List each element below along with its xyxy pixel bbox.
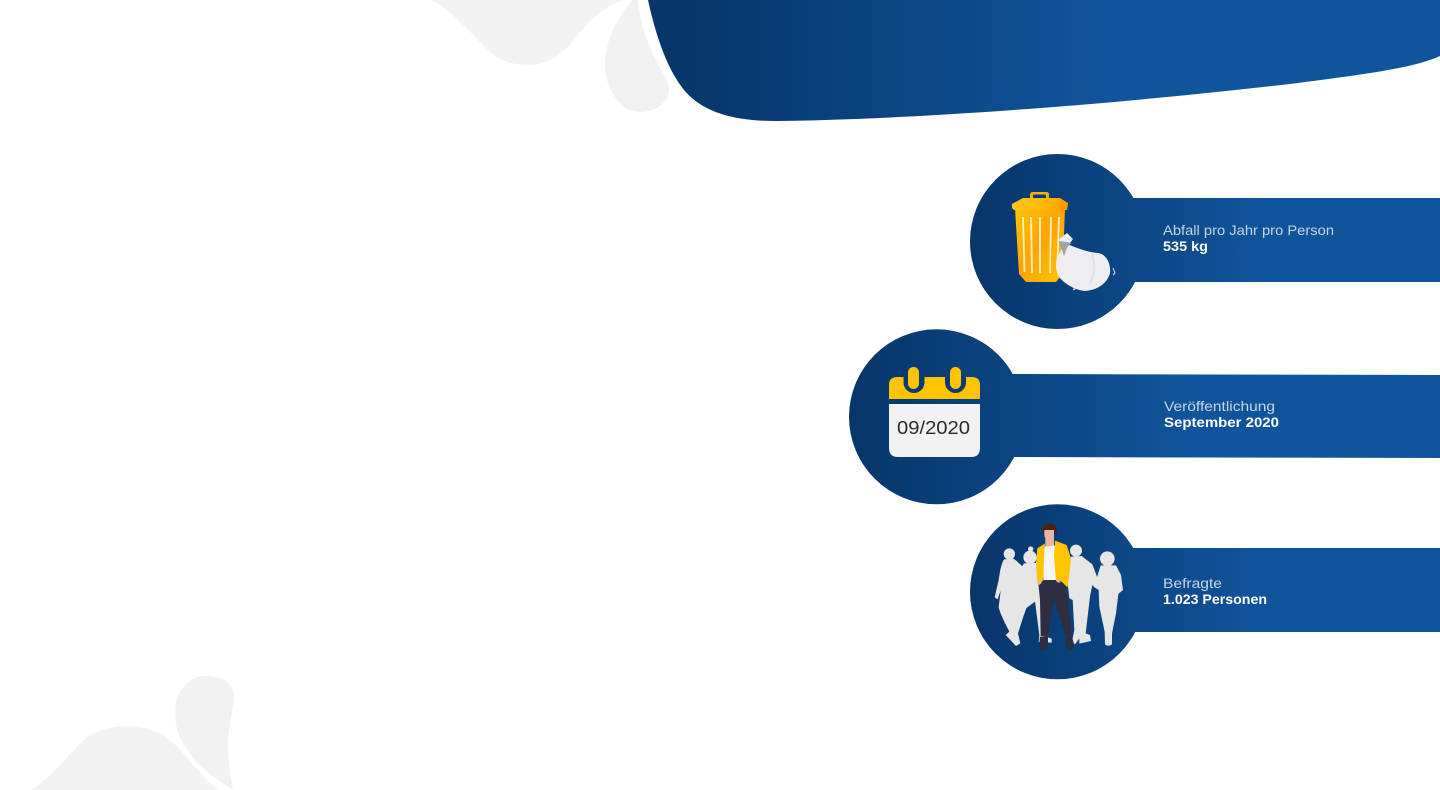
- icon: trash bin with bag: [1012, 192, 1115, 291]
- panel: respondents: [970, 504, 1440, 679]
- icon: calendar: [889, 367, 980, 457]
- decorative shape: bottom grey mound: [32, 726, 218, 790]
- label: waste text: 535 kg: [1163, 238, 1208, 254]
- label: respondents text: 1.023 Personen: [1163, 591, 1267, 607]
- label: publication text: September 2020: [1164, 414, 1279, 430]
- decorative shape: top grey drop: [605, 0, 669, 112]
- label: waste text: Abfall pro Jahr pro Person: [1163, 222, 1334, 238]
- panel: publication date: [849, 329, 1440, 504]
- panel: waste per year: [970, 154, 1440, 329]
- icon: calendar: 09/2020: [897, 417, 970, 438]
- band: publication: [1000, 374, 1440, 458]
- band: respondents: [1120, 548, 1440, 632]
- circle: respondents: [970, 504, 1145, 679]
- label: publication text: Veröffentlichung: [1164, 398, 1275, 414]
- decorative shape: bottom grey drop: [175, 676, 234, 790]
- circle: publication: [849, 329, 1024, 504]
- circle: waste: [970, 154, 1145, 329]
- band: waste: [1120, 198, 1440, 282]
- label: respondents text: [1163, 575, 1267, 607]
- decorative shape: top grey mound: [430, 0, 623, 65]
- label: waste text: [1163, 222, 1334, 254]
- top blue banner: [648, 0, 1440, 121]
- label: respondents text: Befragte: [1163, 575, 1222, 591]
- icon: group of people: [995, 524, 1123, 650]
- label: publication text: [1164, 398, 1279, 430]
